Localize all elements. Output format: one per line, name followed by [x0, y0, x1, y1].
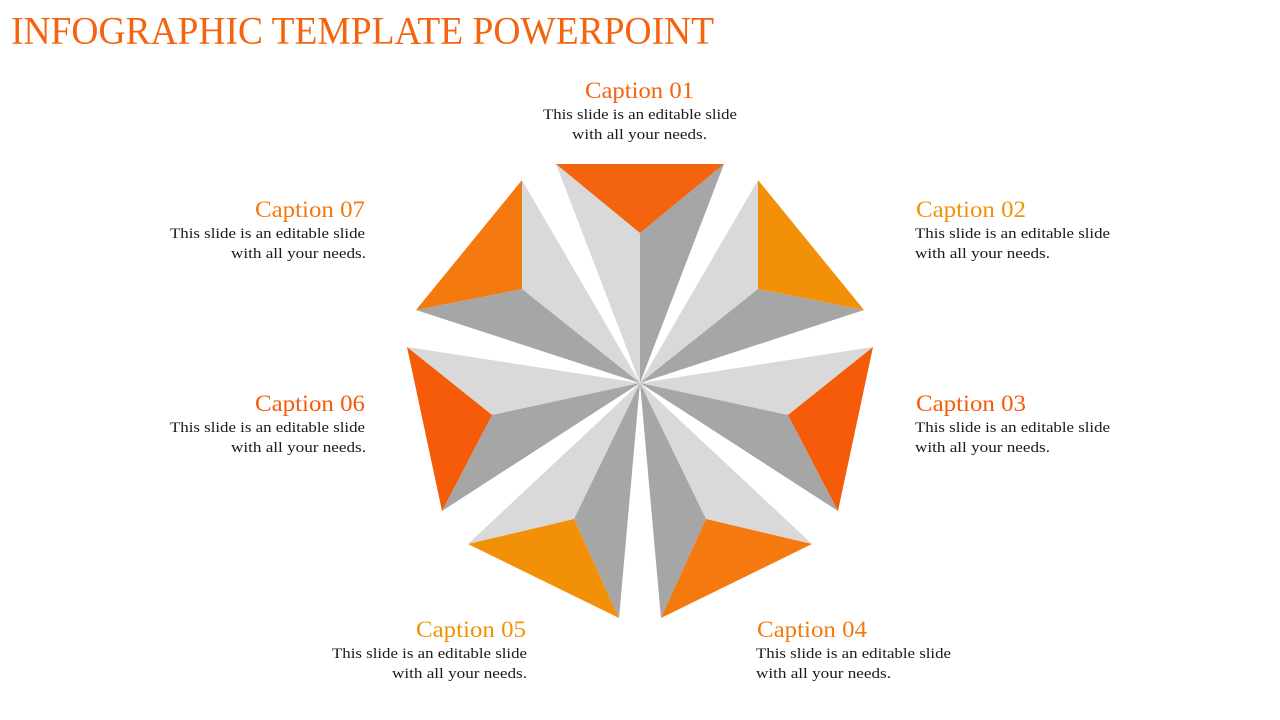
caption 03 [915, 391, 1110, 456]
segment 3 [640, 347, 873, 511]
caption 05: Caption 05 [416, 617, 526, 643]
caption 06 [170, 391, 366, 456]
caption 02 [915, 197, 1110, 262]
caption 01: This slide is an editable slide [543, 106, 737, 123]
caption 03: This slide is an editable slide [915, 419, 1110, 436]
segment 4 [640, 383, 812, 618]
segment 5 [468, 383, 640, 618]
caption 06: with all your needs. [231, 439, 366, 456]
segment 2 [640, 180, 864, 383]
title: INFOGRAPHIC TEMPLATE POWERPOINT [11, 10, 714, 52]
caption 02: with all your needs. [915, 245, 1050, 262]
caption 05: This slide is an editable slide [332, 645, 527, 662]
segment 6 [407, 347, 640, 511]
caption 01: with all your needs. [572, 126, 707, 143]
caption 04 [756, 617, 951, 682]
caption 05 [332, 617, 527, 682]
caption 07: Caption 07 [255, 197, 365, 223]
caption 07: This slide is an editable slide [170, 225, 365, 242]
caption 05: with all your needs. [392, 665, 527, 682]
caption 01 [543, 78, 737, 143]
caption 03: Caption 03 [916, 391, 1026, 417]
segment 7 [416, 180, 640, 383]
caption 02: Caption 02 [916, 197, 1026, 223]
caption 02: This slide is an editable slide [915, 225, 1110, 242]
caption 04: This slide is an editable slide [756, 645, 951, 662]
caption 04: Caption 04 [757, 617, 867, 643]
caption 07 [170, 197, 366, 262]
caption 06: This slide is an editable slide [170, 419, 365, 436]
caption 01: Caption 01 [585, 78, 694, 104]
caption 06: Caption 06 [255, 391, 365, 417]
segment 1 [556, 164, 724, 383]
caption 07: with all your needs. [231, 245, 366, 262]
caption 03: with all your needs. [915, 439, 1050, 456]
diagram: heptagon of folded segments [407, 164, 873, 618]
caption 04: with all your needs. [756, 665, 891, 682]
